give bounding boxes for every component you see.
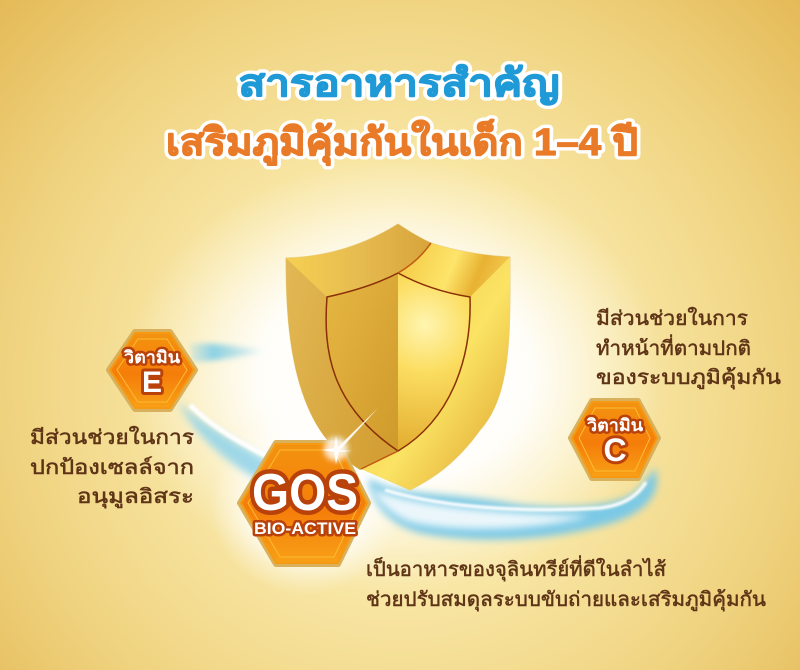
swoosh: upper streak by vitamin E <box>190 344 268 362</box>
swoosh: lower white band, tapered <box>372 488 590 529</box>
hexagon: vitamin C <box>571 401 658 478</box>
text: vitamin C description: มีส่วนช่วยในการ <box>596 307 748 330</box>
title line 1: สารอาหารสำคัญ <box>238 63 560 105</box>
shield inner right <box>398 273 470 451</box>
text: vitamin C description: ของระบบภูมิคุ้มกัน <box>596 367 781 390</box>
swoosh: left blue band <box>178 402 285 482</box>
label: vitamin: วิตามิน <box>124 348 180 367</box>
shield edge highlight <box>398 243 431 273</box>
text: vitamin E description <box>30 426 194 509</box>
swoosh: white streak <box>385 482 646 510</box>
text: vitamin E description: ปกป้องเซลล์จาก <box>30 456 194 479</box>
sparkle <box>322 408 378 464</box>
shield inner outline <box>326 273 470 451</box>
shield top right facet <box>398 243 510 297</box>
text: GOS description <box>366 555 766 612</box>
shield outer shape <box>286 224 510 490</box>
title line 2: เสริมภูมิคุ้มกันในเด็ก 1–4 ปี <box>166 119 638 166</box>
shield <box>286 224 510 490</box>
hexagon: GOS Bio-active <box>240 443 368 564</box>
glow behind GOS hexagon <box>210 415 400 595</box>
shield inner left <box>326 273 398 451</box>
title line 1: สารอาหารสำคัญ <box>238 63 560 105</box>
text: vitamin C description: ทำหน้าที่ตามปกติ <box>596 334 751 360</box>
GOS wordmark: GOS <box>252 464 358 522</box>
swoosh: left white streak <box>190 405 275 460</box>
letter E: E <box>142 366 162 399</box>
hexagon: vitamin E <box>109 332 195 409</box>
text: GOS description: ช่วยปรับสมดุลระบบขับถ่ายและเสริมภูมิคุ้มกัน <box>366 589 766 612</box>
text: vitamin E description: มีส่วนช่วยในการ <box>30 426 194 449</box>
title line 2: เสริมภูมิคุ้มกันในเด็ก 1–4 ปี <box>166 119 638 166</box>
title <box>166 63 638 166</box>
central glow <box>125 160 665 590</box>
label: vitamin: วิตามิน <box>587 416 643 435</box>
swoosh: lower blue band <box>368 468 657 540</box>
shield right lower band <box>361 257 510 490</box>
text: vitamin E description: อนุมูลอิสระ <box>77 486 194 509</box>
text: vitamin C description <box>596 307 781 390</box>
light swoosh <box>178 344 657 540</box>
text: GOS description: เป็นอาหารของจุลินทรีย์ที่ดีในลำไส้ <box>366 555 666 582</box>
letter C: C <box>603 432 627 468</box>
Bio-active wordmark: BIO-ACTIVE <box>254 519 356 538</box>
shield left side <box>286 258 398 470</box>
shield top left facet <box>286 224 431 297</box>
